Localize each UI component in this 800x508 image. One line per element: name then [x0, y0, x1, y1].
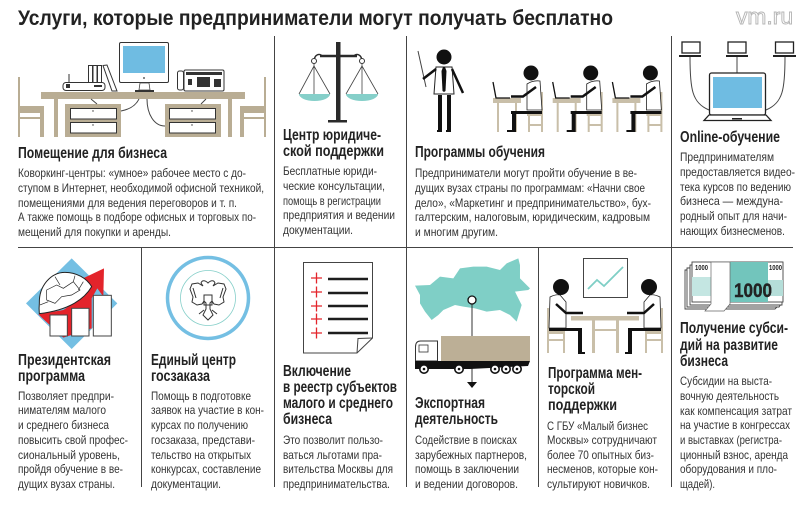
heading: Программа мен-: [548, 365, 642, 382]
student 2: [553, 66, 603, 132]
icon: connected laptops: [679, 42, 796, 120]
body text: повысить свой профес-: [18, 433, 128, 447]
body text: сиональный уровень,: [18, 448, 120, 462]
body text: помещениями для ведения переговоров и т. п.: [18, 196, 237, 210]
icon: document with list: [304, 262, 372, 353]
heading: поддержки: [548, 397, 617, 414]
body text: и ведении договоров.: [415, 477, 518, 491]
body text: мещений для покупки и аренды.: [18, 225, 171, 239]
body text: пройдя обучение в ве-: [18, 462, 123, 476]
heading: Программы обучения: [415, 144, 545, 161]
icon: mentor meeting: [547, 258, 663, 354]
body text: Субсидии на выста-: [680, 374, 772, 388]
body text: Бесплатные юриди-: [283, 164, 377, 178]
body text: Предпринимателям: [680, 150, 774, 164]
body text: Позволяет предпри-: [18, 389, 114, 403]
body text: предприятия и ведении: [283, 208, 395, 222]
body text: Предприниматели могут пройти обучение в ве-: [415, 166, 637, 180]
body text: вительства Москвы для: [283, 462, 393, 476]
body text: [18, 166, 264, 239]
body text: дело», «Маркетинг и предпринимательство», бух-: [415, 196, 651, 210]
body text: конкурсах, составление: [151, 462, 261, 476]
body text: документации.: [151, 477, 221, 491]
panel: экспортная деятельность: [415, 258, 530, 491]
student 3: [612, 66, 662, 132]
body text: Москвы» сотрудничают: [547, 433, 657, 447]
panel: единый центр госзаказа: [151, 258, 264, 491]
body text: Коворкинг-центры: «умное» рабочее место с до-: [18, 166, 246, 180]
body text: [415, 433, 527, 491]
banknote value: 1000: [769, 265, 782, 272]
heading: Единый центр: [151, 352, 236, 369]
body text: вочную деятельность: [680, 389, 779, 403]
heading: Включение: [283, 363, 351, 380]
body text: Содействие в поисках: [415, 433, 517, 447]
heading: [680, 320, 788, 370]
icon: globe, arrow and bars: [26, 258, 117, 349]
body text: [547, 419, 658, 491]
heading: [415, 395, 498, 428]
heading: в реестр субъектов: [283, 379, 397, 396]
watermark: vm.ru: vm.ru: [736, 4, 793, 29]
heading: бизнеса: [283, 411, 332, 428]
heading: программа: [18, 368, 85, 385]
body text: ваться льготами пра-: [283, 448, 382, 462]
body text: госзаказа, представи-: [151, 433, 255, 447]
body text: сультируют новичков.: [547, 477, 650, 491]
body text: галтерским, налоговым, юридическим, кадровым: [415, 210, 650, 224]
body text: тельство на открытых: [151, 448, 251, 462]
body text: бизнеса — междуна-: [680, 194, 783, 208]
heading: ской поддержки: [283, 143, 384, 160]
icon: teacher and students: [418, 50, 662, 132]
body text: [18, 389, 128, 491]
body text: А также помощь в подборе офисных и торговых по-: [18, 210, 256, 224]
body text: заявок на участие в кон-: [151, 403, 264, 417]
heading: [283, 127, 384, 160]
body text: [283, 433, 393, 491]
panel: помещение для бизнеса: [18, 42, 266, 239]
panel: включение в реестр: [283, 262, 397, 491]
heading: торской: [548, 381, 595, 398]
body text: [151, 389, 264, 491]
heading: [151, 352, 236, 385]
heading: деятельность: [415, 411, 498, 428]
body text: более 70 опытных биз-: [547, 448, 654, 462]
panel: центр юридической поддержки: [283, 42, 395, 237]
body text: щадей).: [680, 477, 715, 491]
body text: помощь в регистрации: [283, 194, 381, 208]
body text: ступом в Интернет, необходимой офисной техникой,: [18, 181, 264, 195]
body text: дущих вузах страны.: [18, 477, 115, 491]
panel: программа менторской поддержки: [547, 258, 663, 491]
icon: seal with eagle: [168, 258, 248, 338]
body text: Это позволит пользо-: [283, 433, 383, 447]
panel: программы обучения: [415, 50, 662, 239]
student 1: [493, 66, 543, 132]
body text: нимателям малого: [18, 403, 106, 417]
body text: и среднего бизнеса: [18, 418, 109, 432]
body text: оборудования и пло-: [680, 462, 777, 476]
icon: map and truck: [415, 258, 530, 388]
icon: scales: [299, 42, 378, 122]
body text: [283, 164, 395, 237]
body text: документации.: [283, 223, 353, 237]
body text: несменов, которые кон-: [547, 462, 658, 476]
banknote value: 1000: [695, 265, 708, 272]
heading: бизнеса: [680, 353, 728, 370]
heading: Центр юридиче-: [283, 127, 381, 144]
body text: помощь в заключении: [415, 462, 519, 476]
body text: и многим другим.: [415, 225, 498, 239]
icon: office desk with computer: [18, 42, 266, 137]
panel: online-обучение: [679, 42, 796, 238]
heading: Экспортная: [415, 395, 485, 412]
heading: малого и среднего: [283, 395, 393, 412]
heading: [18, 352, 111, 385]
body text: дущих вузах страны по программам: «Начни свое: [415, 181, 645, 195]
body text: зарубежных партнеров,: [415, 448, 527, 462]
body text: [680, 374, 792, 491]
heading: [283, 363, 397, 428]
body text: С ГБУ «Малый бизнес: [547, 419, 648, 433]
banknote value large: 1000: [734, 280, 772, 302]
body text: [415, 166, 651, 239]
body text: [680, 150, 795, 238]
body text: курсах по получению: [151, 418, 248, 432]
icon: stack of banknotes: [685, 262, 783, 311]
heading: госзаказа: [151, 368, 210, 385]
panel: получение субсидий: [680, 262, 792, 491]
title: Услуги, которые предприниматели могут получать бесплатно: [18, 7, 613, 30]
heading: [548, 365, 642, 414]
body text: ческие консультации,: [283, 179, 385, 193]
body text: Помощь в подготовке: [151, 389, 251, 403]
heading: Помещение для бизнеса: [18, 145, 167, 162]
body text: предпринимательства.: [283, 477, 390, 491]
panel: президентская программа: [18, 258, 128, 491]
heading: Президентская: [18, 352, 111, 369]
